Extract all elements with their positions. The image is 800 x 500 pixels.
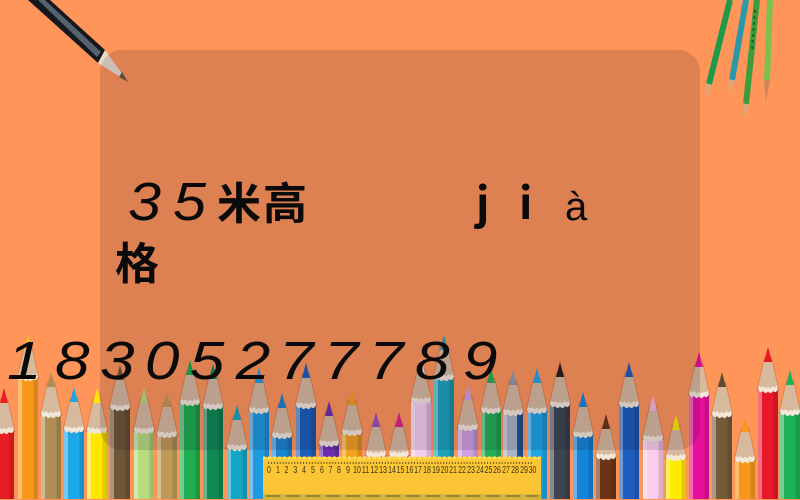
title: 米高ji [217,168,532,232]
pencil: tan two [156,392,178,499]
pencil: teal [729,0,746,96]
pencil: light green [132,388,156,499]
pencil: teal [226,405,248,499]
pencil: green [706,0,730,99]
ruler numbers: 10 [353,464,361,476]
pencil: tan [40,372,62,499]
pencil: azure [248,368,270,499]
ruler numbers: 30 [529,464,536,476]
pencil: chocolate [594,414,618,499]
ruler numbers: 15 [397,464,404,476]
ruler numbers: 16 [406,464,413,476]
pencil: orange [16,335,40,499]
pencil: violet [364,412,388,499]
ruler numbers: 29 [520,464,528,476]
pencil: mid green [480,368,502,499]
ruler numbers: 24 [476,464,484,476]
pencil: pale lilac [410,358,432,499]
pencil: umber [710,372,734,499]
panel: translucent overlay [100,50,700,450]
pencil: top-left graphite pencil [28,0,128,82]
pencil: red [0,388,16,499]
pencil: azure two [270,393,294,499]
ruler numbers: 19 [432,464,440,476]
title: 35 [128,172,207,232]
pencil: crimson [756,347,780,499]
pencil: lilac [456,385,480,499]
pencil: patterned green [743,0,757,119]
pencil: sky blue [62,387,86,499]
pencil: purple [318,401,340,499]
title [115,168,588,292]
ruler numbers: 26 [493,464,501,476]
ruler numbers: 3 [293,464,297,476]
pencil: yellow [86,388,108,499]
ruler numbers: 1 [276,464,280,476]
ruler numbers: 14 [388,464,396,476]
ruler numbers: 2 [285,464,288,476]
pencil: lime [764,0,770,102]
pencil: grey blue [502,370,524,499]
ruler numbers: 8 [337,464,341,476]
pencil: dark teal [432,335,456,499]
pencil: lemon [664,415,688,499]
ruler numbers: 13 [379,464,387,476]
ruler numbers: 18 [423,464,431,476]
ruler [263,457,541,500]
title: 格 [115,228,159,292]
ruler numbers: 21 [449,464,457,476]
ruler numbers: 11 [362,464,369,476]
ruler numbers: 25 [485,464,492,476]
pencil: fuchsia [688,352,710,499]
pencil: blue [572,392,594,499]
pencils: top-right coloured pencils [706,0,770,119]
ruler numbers: 22 [458,464,466,476]
title: à [565,185,588,229]
ruler numbers: 12 [370,464,378,476]
pencil: tangerine [734,417,756,499]
pencil: royal blue [294,363,318,499]
pencil: cobalt [618,362,640,499]
phone number: 18305277789 [7,331,498,391]
pencil: light blue [526,368,548,499]
ruler numbers: 27 [502,464,510,476]
ruler numbers: 28 [511,464,519,476]
pencil: dark green [202,364,224,499]
ruler numbers: 20 [441,464,448,476]
ruler numbers: 17 [414,464,422,476]
ruler numbers: 23 [467,464,475,476]
ruler numbers [267,464,536,476]
pencil: green [178,360,202,499]
pencil: magenta [388,412,410,499]
pencil: emerald [778,370,800,499]
ruler numbers: 5 [311,464,315,476]
ruler numbers: 4 [302,464,306,476]
ruler numbers: 9 [346,464,350,476]
pencil row [0,335,800,499]
pencil: amber [340,390,364,499]
pencil: pink [642,396,664,499]
ruler numbers: 7 [329,464,332,476]
ruler numbers: 0 [267,464,271,476]
pencil: dark brown [108,365,132,499]
pencil: charcoal [548,362,572,499]
ruler numbers: 6 [320,464,324,476]
